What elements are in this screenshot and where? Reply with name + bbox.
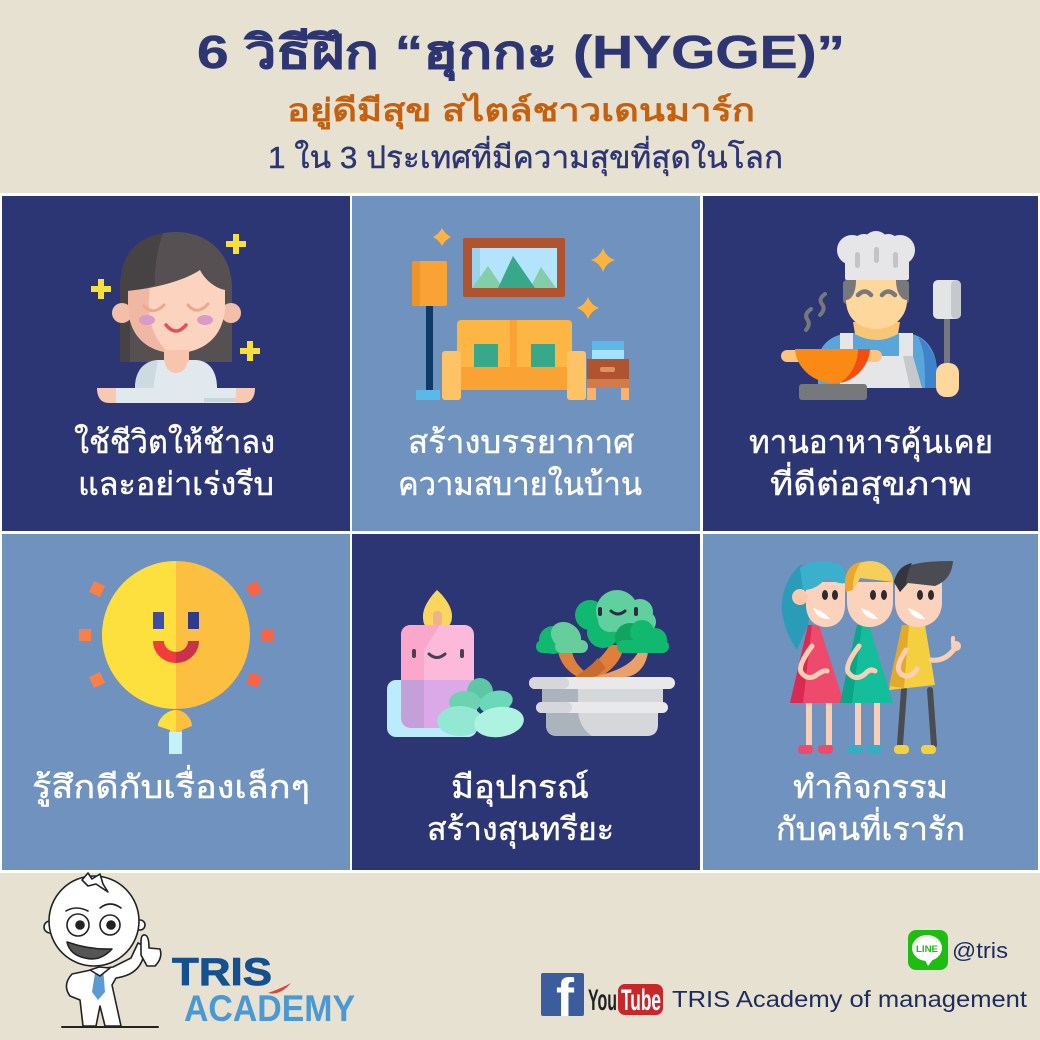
label: activities: กับคนที่เรารัก bbox=[776, 807, 965, 847]
icon: YouTube: Tube bbox=[621, 984, 661, 1017]
icon: three friends bbox=[782, 561, 961, 754]
logo: TRIS Academy bbox=[172, 951, 355, 1029]
title: 6 วิธีฝึก “ฮุกกะ (HYGGE)” bbox=[197, 26, 845, 81]
icon: candle bbox=[387, 590, 526, 740]
icon: facebook bbox=[541, 968, 584, 1028]
label: cosy home: สร้างบรรยากาศ bbox=[408, 424, 634, 460]
icon: living room bbox=[412, 238, 629, 400]
icon: balloon dots bbox=[79, 581, 273, 688]
subtitle: อยู่ดีมีสุข สไตล์ชาวเดนมาร์ก bbox=[287, 92, 755, 130]
label: activities bbox=[776, 769, 965, 847]
label: activities: ทำกิจกรรม bbox=[793, 769, 948, 805]
label: cosy home bbox=[398, 424, 642, 502]
panel: healthy food bbox=[703, 196, 1038, 531]
panel: small things bbox=[2, 534, 350, 870]
icon: YouTube: You bbox=[588, 984, 617, 1017]
icon: calm girl bbox=[97, 232, 255, 403]
icon: steam bbox=[806, 294, 825, 330]
label: healthy food: ทานอาหารคุ้นเคย bbox=[749, 424, 993, 462]
icon: facebook: f bbox=[556, 968, 575, 1028]
label: slow down: และอย่าเร่งรีบ bbox=[78, 466, 274, 502]
header band bbox=[0, 0, 1040, 193]
icon: LINE bbox=[908, 930, 948, 970]
icon: balloon bbox=[102, 561, 250, 754]
mascot: thumbs-up cartoon man bbox=[44, 873, 161, 1027]
label: healthy food bbox=[749, 424, 993, 504]
handle: TRIS Academy of management: TRIS Academy of management bbox=[672, 986, 1028, 1012]
icon: LINE: LINE bbox=[916, 944, 938, 954]
label: aesthetic items: มีอุปกรณ์ bbox=[451, 769, 589, 807]
label: slow down bbox=[74, 424, 275, 502]
panel: slow down bbox=[2, 196, 350, 531]
panel: aesthetic items bbox=[352, 534, 700, 870]
label: aesthetic items: สร้างสุนทรียะ bbox=[427, 811, 614, 849]
tagline: 1 ใน 3 ประเทศที่มีความสุขที่สุดในโลก bbox=[268, 136, 783, 177]
label: small things: รู้สึกดีกับเรื่องเล็กๆ bbox=[32, 765, 310, 807]
footer band bbox=[0, 873, 1040, 1040]
logo: TRIS Academy: ACADEMY bbox=[184, 988, 355, 1029]
icon: chef bbox=[781, 231, 961, 400]
panel: activities with loved ones bbox=[703, 534, 1038, 870]
logo: TRIS Academy: TRIS bbox=[172, 951, 272, 994]
icon: bonsai bbox=[529, 590, 675, 736]
label: cosy home: ความสบายในบ้าน bbox=[398, 466, 642, 502]
handle: line: @tris bbox=[952, 938, 1008, 963]
label: healthy food: ที่ดีต่อสุขภาพ bbox=[770, 462, 972, 504]
label: aesthetic items bbox=[427, 769, 614, 849]
label: slow down: ใช้ชีวิตให้ช้าลง bbox=[74, 424, 275, 460]
icon: sparkles bbox=[91, 234, 260, 361]
panel: cosy home bbox=[352, 196, 700, 531]
icon: stars bbox=[433, 228, 615, 319]
